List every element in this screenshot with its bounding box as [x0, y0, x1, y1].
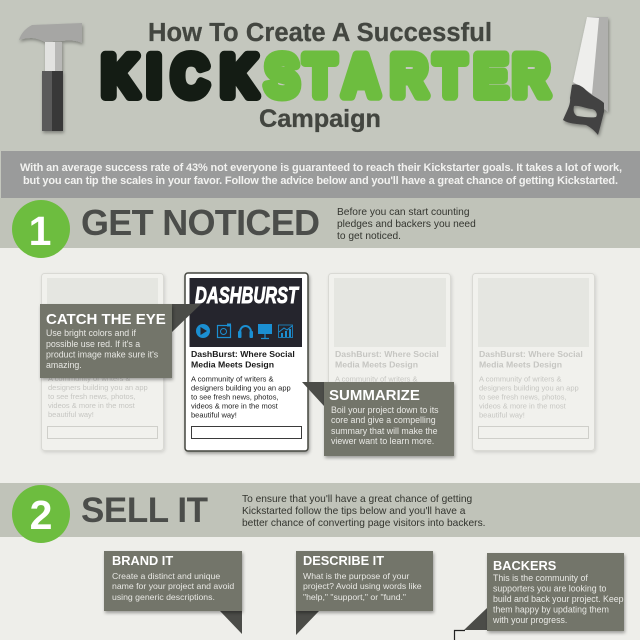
callout: describe it	[296, 551, 433, 635]
panel: faded card 1: A community of writers &	[48, 374, 131, 383]
panel: faded card 4: to see fresh news, photos,	[479, 392, 567, 402]
banner: introduction: but you can tip the scales in your favor. Follow the advice below and you'll have a great chance of getting Kickstarted.	[23, 175, 618, 187]
card button	[192, 426, 302, 438]
callout body: Create a distinct and unique	[112, 571, 220, 581]
icon: number 1	[12, 200, 70, 258]
text: section 1 intro: to get noticed.	[337, 231, 401, 242]
text: section 1 intro: pledges and backers you need	[337, 219, 476, 230]
heading: starter: STARTER	[265, 44, 549, 109]
callout body: product image make sure it's	[46, 350, 159, 360]
logo: dashburst: DASHBURST	[195, 282, 299, 308]
callout body: Boil your project down to its	[331, 405, 439, 415]
callout body: Use bright colors and if	[46, 328, 137, 338]
panel: faded card 1: beautiful way!	[48, 410, 94, 419]
callout body: with your progress.	[492, 615, 567, 625]
text: section 2 intro: To ensure that you'll have a great chance of getting	[242, 494, 473, 505]
card description: to see fresh news, photos,	[191, 392, 279, 402]
panel: faded card 1: designers building you an app	[48, 383, 148, 392]
panel: faded card 3: Media Meets Design	[335, 360, 418, 370]
panel: faded card 4: designers building you an app	[479, 384, 579, 392]
panel: faded card 4: videos & more in the most	[479, 402, 567, 410]
icon: number 2	[12, 485, 70, 543]
card title: DashBurst: Where Social	[191, 349, 295, 359]
section 1 header band	[0, 198, 640, 258]
callout body: build and back your project. Keep	[493, 594, 624, 604]
text: section 1 intro: Before you can start counting	[337, 207, 470, 218]
panel: faded card 3: A community of writers &	[335, 374, 418, 384]
text: section 2 intro: Kickstarted follow the tips below and you'll have a	[242, 506, 466, 517]
panel: faded card 4: Media Meets Design	[479, 360, 562, 370]
callout body: core and give a compelling	[331, 415, 436, 425]
card title: Media Meets Design	[191, 360, 274, 370]
callout body: using generic descriptions.	[112, 592, 215, 602]
callout body: project? Avoid using words like	[303, 581, 422, 591]
panel: faded card 1	[42, 274, 164, 450]
callout heading: CATCH THE EYE	[46, 311, 166, 328]
callout body: This is the community of	[493, 573, 588, 583]
callout body: viewer want to learn more.	[331, 436, 434, 446]
banner: introduction: With an average success rate of 43% not everyone is guaranteed to reach their Kickstarter goals. It takes a lot of work,	[20, 162, 622, 174]
icon: hammer	[19, 23, 82, 131]
panel: faded card 3	[328, 274, 450, 450]
panel: faded card 4: beautiful way!	[479, 410, 525, 420]
section 2 header band	[0, 483, 640, 543]
callout: summarize	[302, 382, 454, 456]
heading: sell it: SELL IT	[81, 491, 208, 530]
icon: play	[196, 324, 210, 338]
panel: highlighted DashBurst card	[185, 273, 308, 451]
callout body: amazing.	[46, 360, 82, 370]
icon: number 2: 2	[30, 492, 52, 538]
card description: designers building you an app	[191, 384, 291, 392]
heading: kick: KICK	[102, 44, 257, 109]
text: section 2 intro: better chance of converting page visitors into backers.	[242, 518, 486, 529]
heading: how to create: How To Create A Successful	[148, 19, 492, 47]
icon: presentation screen	[258, 324, 272, 338]
card description: videos & more in the most	[191, 402, 279, 410]
callout body: What is the purpose of your	[303, 571, 409, 581]
icon: camera	[218, 324, 231, 338]
panel: faded card 3: DashBurst: Where Social	[335, 349, 439, 359]
callout body: possible use red. If it's a	[46, 339, 140, 349]
callout: backers	[454, 553, 624, 640]
card description: A community of writers &	[191, 374, 274, 384]
panel: faded card 4	[472, 274, 594, 450]
heading: campaign: Campaign	[259, 105, 381, 133]
callout heading: SUMMARIZE	[329, 387, 420, 404]
icon: headphones	[238, 326, 253, 338]
callout body: "help," "support," or "fund."	[303, 592, 406, 602]
callout heading: BACKERS	[493, 558, 557, 573]
panel: faded card 1: to see fresh news, photos,	[48, 392, 136, 401]
banner: introduction	[1, 151, 640, 198]
heading: get noticed: GET NOTICED	[81, 202, 320, 243]
callout: brand it	[104, 551, 242, 634]
callout body: summary that will make the	[331, 426, 438, 436]
callout: catch the eye	[40, 304, 201, 378]
panel: faded card 4: DashBurst: Where Social	[479, 349, 583, 359]
callout body: name for your project and avoid	[112, 581, 234, 591]
icon: chart	[278, 325, 292, 338]
panel: faded card 1: videos & more in the most	[48, 401, 136, 410]
icon: number 1: 1	[29, 208, 51, 254]
card image	[190, 278, 302, 347]
card description: beautiful way!	[191, 410, 237, 420]
icon: saw	[563, 17, 608, 135]
callout body: supporters you are looking to	[493, 584, 607, 594]
callout heading: BRAND IT	[112, 553, 173, 568]
callout body: them happy by updating them	[493, 604, 609, 614]
callout heading: DESCRIBE IT	[303, 553, 384, 568]
panel: faded card 4: A community of writers &	[479, 374, 562, 384]
